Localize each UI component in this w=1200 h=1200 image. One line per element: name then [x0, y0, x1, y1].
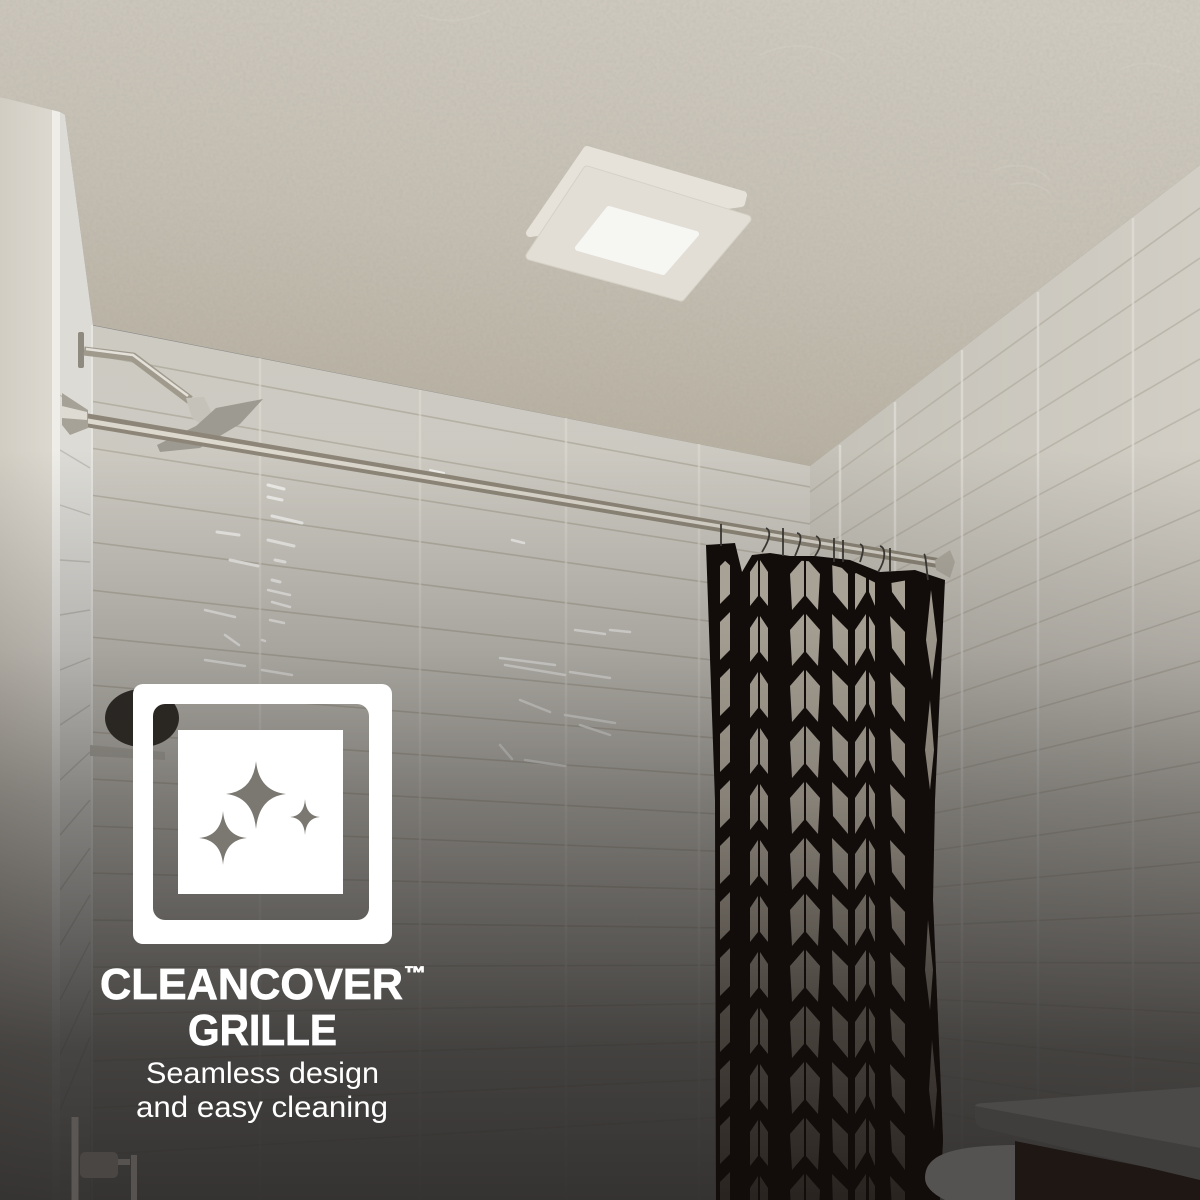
description: Seamless design: [146, 1057, 379, 1090]
right edge chevrons: [925, 590, 937, 1130]
bath fan with cleancover grille: [530, 150, 747, 297]
tile glare reflections: [205, 470, 630, 766]
back tile wall: [90, 325, 810, 1200]
left pillar and side wall: [0, 97, 93, 1200]
shower curtain: [700, 524, 950, 1200]
ceiling: [0, 0, 1200, 466]
heading: CLEANCOVER: [100, 961, 403, 1009]
feature callout: [100, 684, 426, 1124]
description: [136, 1057, 388, 1124]
heading: [100, 961, 426, 1055]
shower curtain rod: [62, 393, 955, 578]
right tile wall: [810, 165, 1200, 1200]
heading: GRILLE: [188, 1007, 337, 1055]
curtain shadow gradient: [715, 649, 941, 1200]
icon: grille with sparkles: [133, 684, 392, 944]
vanity, toilet and faucet: [75, 1087, 1200, 1200]
description: and easy cleaning: [136, 1091, 388, 1124]
sponge on shelf: [90, 689, 179, 760]
shower arm and head: [78, 332, 263, 452]
heading: ™: [404, 963, 426, 983]
curtain hooks: [721, 524, 928, 580]
